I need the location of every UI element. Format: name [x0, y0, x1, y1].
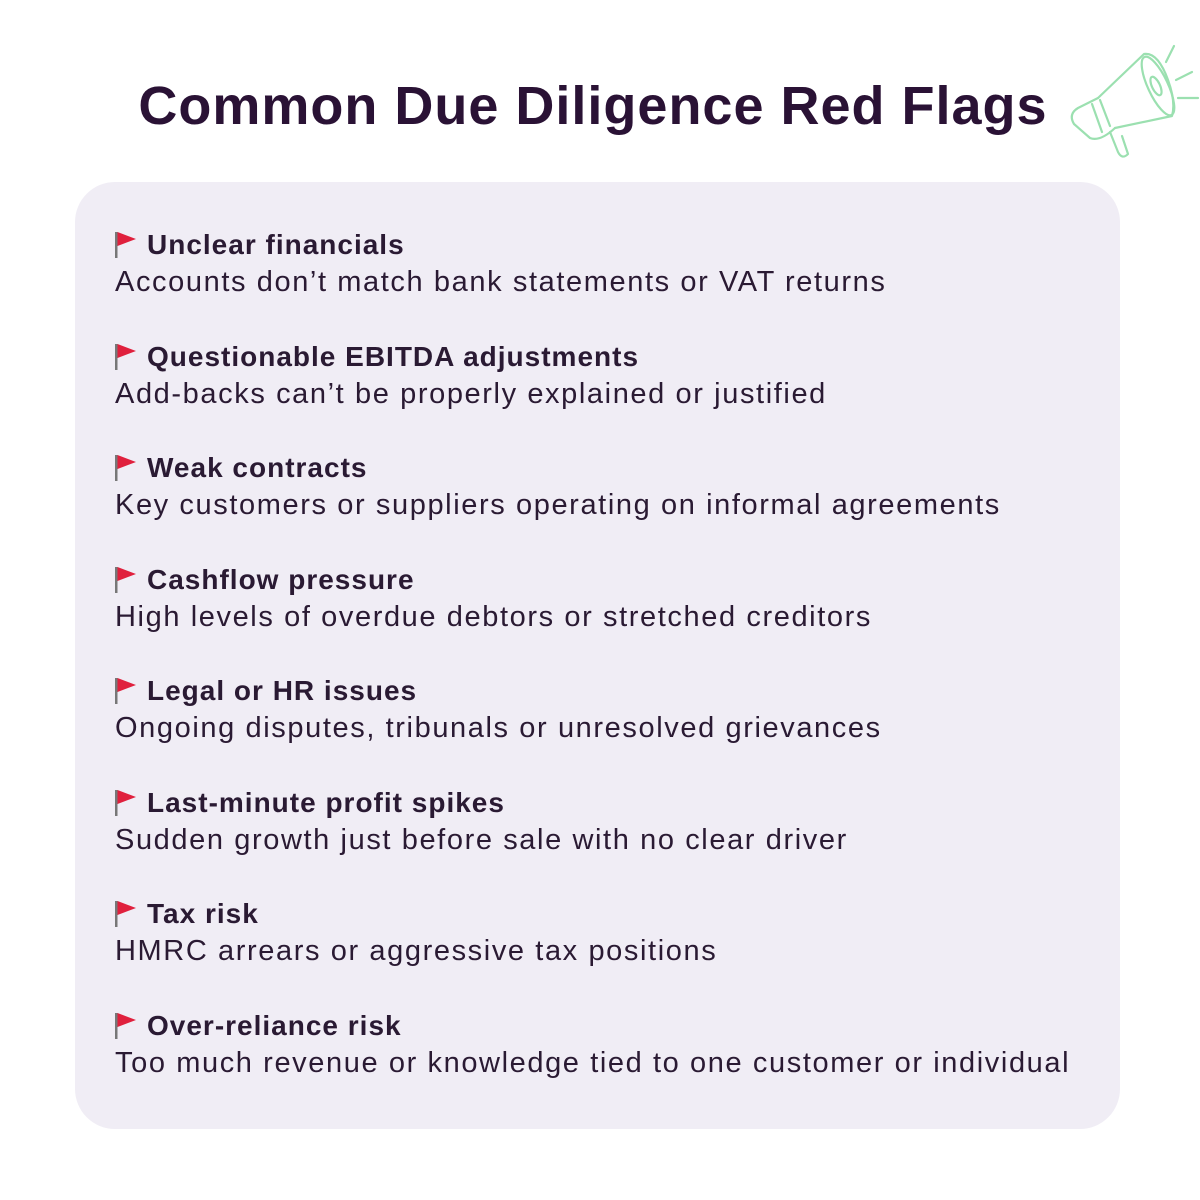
- title: Common Due Diligence Red Flags: [138, 76, 1048, 136]
- item 4: [115, 564, 872, 633]
- item 1: [115, 229, 886, 298]
- item 1: Unclear financials: [147, 229, 405, 260]
- item 7: Tax risk: [147, 898, 259, 929]
- item 6: [115, 787, 848, 856]
- item 3: Key customers or suppliers operating on informal agreements: [115, 489, 1001, 521]
- item 8: Too much revenue or knowledge tied to one customer or individual: [115, 1047, 1070, 1079]
- item 4: High levels of overdue debtors or stretched creditors: [115, 601, 872, 633]
- item 3: [115, 452, 1001, 521]
- item 1: Accounts don’t match bank statements or VAT returns: [115, 266, 886, 298]
- item 2: [115, 341, 827, 410]
- item 7: HMRC arrears or aggressive tax positions: [115, 935, 717, 967]
- item 8: [115, 1010, 1070, 1079]
- icon: megaphone: [1070, 44, 1199, 158]
- item 6: Sudden growth just before sale with no clear driver: [115, 824, 848, 856]
- item 3: Weak contracts: [147, 452, 367, 483]
- item 8: Over-reliance risk: [147, 1010, 402, 1041]
- item 5: Legal or HR issues: [147, 675, 417, 706]
- item 2: Questionable EBITDA adjustments: [147, 341, 639, 372]
- item 5: Ongoing disputes, tribunals or unresolved grievances: [115, 712, 882, 744]
- item 4: Cashflow pressure: [147, 564, 415, 595]
- item 2: Add-backs can’t be properly explained or justified: [115, 378, 827, 410]
- item 6: Last-minute profit spikes: [147, 787, 505, 818]
- item 5: [115, 675, 882, 744]
- item 7: [115, 898, 717, 967]
- panel: red flags list: [75, 182, 1120, 1129]
